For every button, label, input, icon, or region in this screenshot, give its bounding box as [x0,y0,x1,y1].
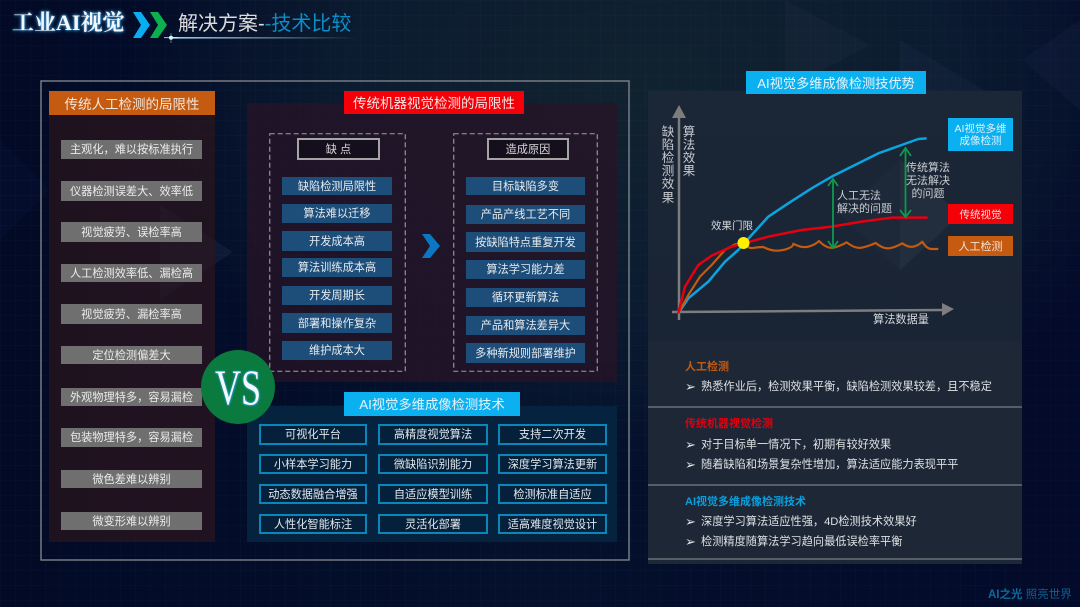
item [61,346,202,364]
item [61,140,202,159]
item [282,204,392,223]
item: 微色差难以辨别 [92,474,171,486]
feature: 小样本学习能力 [274,458,352,470]
axis label: algorithm effect: 果 [683,164,696,178]
legend: AI: 成像检测 [960,134,1002,147]
feature [378,424,488,445]
heading: machine vision [344,91,524,114]
item: 按缺陷特点重复开发 [475,236,576,248]
panel: manual inspection limitations [49,91,215,542]
item [466,205,585,224]
feature: 自适应模型训练 [394,488,472,500]
item: 视觉疲劳、漏检率高 [81,308,182,320]
heading: AI technology [344,392,520,416]
note heading: AI视觉多维成像检测技术 [685,496,806,508]
bullet: ➢ [685,457,696,472]
item: 算法学习能力差 [486,264,565,276]
item [282,177,392,195]
gap label: traditional: 无法解决 [906,173,950,187]
note: AI [685,496,917,549]
item: 多种新规则部署维护 [475,348,576,360]
item: 仪器检测误差大、效率低 [70,186,193,198]
item [466,288,585,307]
y axis [672,105,686,320]
feature: 可视化平台 [285,429,341,441]
item [282,231,392,251]
gap label: traditional: 的问题 [912,186,944,200]
note heading: 人工检测 [685,361,729,373]
icon: double chevron [133,12,167,38]
item: 目标缺陷多变 [492,180,559,192]
bullet: 检测精度随算法学习趋向最低误检率平衡 [701,536,902,548]
feature [498,484,607,504]
item [61,512,202,530]
feature: 人性化智能标注 [274,518,352,530]
axis label: algorithm effect: 效 [683,150,696,165]
feature: 高精度视觉算法 [394,429,472,441]
item [466,343,585,363]
item: 定位检测偏差大 [92,350,171,362]
panel: machine vision limitations [247,91,617,382]
feature [498,424,607,445]
subtitle underline [164,33,350,43]
label: causes [487,138,569,160]
label: shortcomings [297,138,380,160]
item: 缺陷检测局限性 [298,180,376,192]
feature [378,514,488,534]
feature [378,454,488,474]
item: 产品产线工艺不同 [481,209,570,221]
item: 外观物理特多，容易漏检 [70,392,193,404]
item [282,313,392,333]
item: 产品和算法差异大 [481,320,570,332]
item [61,181,202,201]
item: 包装物理特多，容易漏检 [70,432,193,444]
outer frame [40,80,630,561]
line chart [662,105,1013,326]
gap arrow: manual [828,179,838,248]
feature: 支持二次开发 [519,429,586,441]
title: 工业AI视觉 [12,10,124,35]
bullet: 随着缺陷和场景复杂性增加，算法适应能力表现平平 [701,459,958,471]
legend: traditional vision [948,204,1013,224]
feature [259,454,367,474]
gap label: manual: 解决的问题 [837,201,892,215]
axis label: algorithm effect: 法 [683,138,695,152]
icon: VS badge: VS [215,358,261,414]
item: 开发成本高 [309,236,365,248]
label: shortcomings: 缺 点 [326,144,351,156]
panel: AI multi-dimensional imaging technology [247,392,617,542]
bullet: ➢ [685,379,696,394]
axis label: defect effect: 效 [662,176,675,191]
feature: 深度学习算法更新 [508,458,597,470]
label: causes: 造成原因 [506,144,550,156]
group: causes [453,133,598,372]
gap arrow: traditional [900,148,911,217]
heading: chart [746,71,926,94]
note: manual [685,360,992,394]
axis label: defect effect: 陷 [662,137,674,152]
axis label: defect effect: 缺 [662,124,675,139]
feature: 检测标准自适应 [513,488,592,500]
axis label: defect effect: 检 [662,150,675,165]
feature [378,484,488,504]
item: 主观化，难以按标准执行 [70,144,193,156]
feature [498,514,607,534]
item: 算法训练成本高 [298,262,376,274]
legend: AI: AI视觉多维 [955,122,1007,135]
item [282,341,392,360]
bullet: ➢ [685,534,696,549]
feature [259,424,367,445]
item [466,316,585,335]
footer slogan: AI之光 照亮世界 [988,589,1072,601]
item [282,286,392,305]
item [466,260,585,279]
feature [259,514,367,534]
axis label: data volume: 算法数据量 [873,312,929,326]
heading: machine vision: 传统机器视觉检测的局限性 [353,96,515,111]
heading: chart: AI视觉多维成像检测技优势 [757,76,915,90]
axis label: algorithm effect: 算 [683,124,695,139]
item: 部署和操作复杂 [298,318,376,330]
bullet: ➢ [685,514,696,529]
item [61,388,202,406]
subtitle: 解决方案--技术比较 [178,13,351,35]
panel: AI advantage chart [648,71,1022,341]
feature: 灵活化部署 [405,518,461,530]
item [466,232,585,252]
bullet: 对于目标单一情况下，初期有较好效果 [701,439,891,451]
item [61,470,202,488]
heading: AI technology: AI视觉多维成像检测技术 [359,397,505,412]
item: 维护成本大 [309,345,365,357]
item: 人工检测效率低、漏检高 [70,268,193,280]
feature: 微缺陷识别能力 [394,458,472,470]
item: 开发周期长 [309,290,365,302]
item: 算法难以迁移 [303,208,371,220]
threshold point [738,237,750,249]
item: 循环更新算法 [492,292,559,304]
note heading: 传统机器视觉检测 [685,418,773,430]
panel: comparison notes [648,341,1022,564]
feature: 适高难度视觉设计 [508,518,597,530]
feature [498,454,607,474]
axis label: defect effect: 果 [662,191,675,205]
item [61,264,202,282]
x axis [672,303,954,316]
heading: manual inspection [49,91,215,115]
curve: AI imaging [678,138,927,313]
axis label: defect effect: 测 [662,164,674,178]
gap label: manual: 人工无法 [837,188,881,202]
curve: manual inspection [678,241,938,313]
legend: manual: 人工检测 [958,239,1002,253]
legend: manual [948,236,1013,256]
threshold label: 效果门限 [711,219,753,232]
item: 视觉疲劳、误检率高 [81,226,182,238]
feature [259,484,367,504]
item [61,428,202,447]
icon: chevron arrow [422,234,440,258]
item [466,177,585,195]
bullet: 熟悉作业后，检测效果平衡，缺陷检测效果较差，且不稳定 [701,381,992,393]
item: 微变形难以辨别 [92,516,171,528]
curve: traditional vision [678,218,928,313]
group: shortcomings [269,133,406,372]
legend: traditional vision: 传统视觉 [960,208,1002,221]
item [61,304,202,324]
bullet: 深度学习算法适应性强，4D检测技术效果好 [701,516,917,528]
item [282,258,392,277]
gap label: traditional: 传统算法 [906,160,950,174]
note: machine vision [685,418,958,472]
legend: AI [948,118,1013,151]
heading: manual inspection: 传统人工检测的局限性 [64,96,200,112]
bullet: ➢ [685,437,696,452]
icon: VS badge [201,350,275,424]
item [61,222,202,242]
feature: 动态数据融合增强 [268,488,358,500]
